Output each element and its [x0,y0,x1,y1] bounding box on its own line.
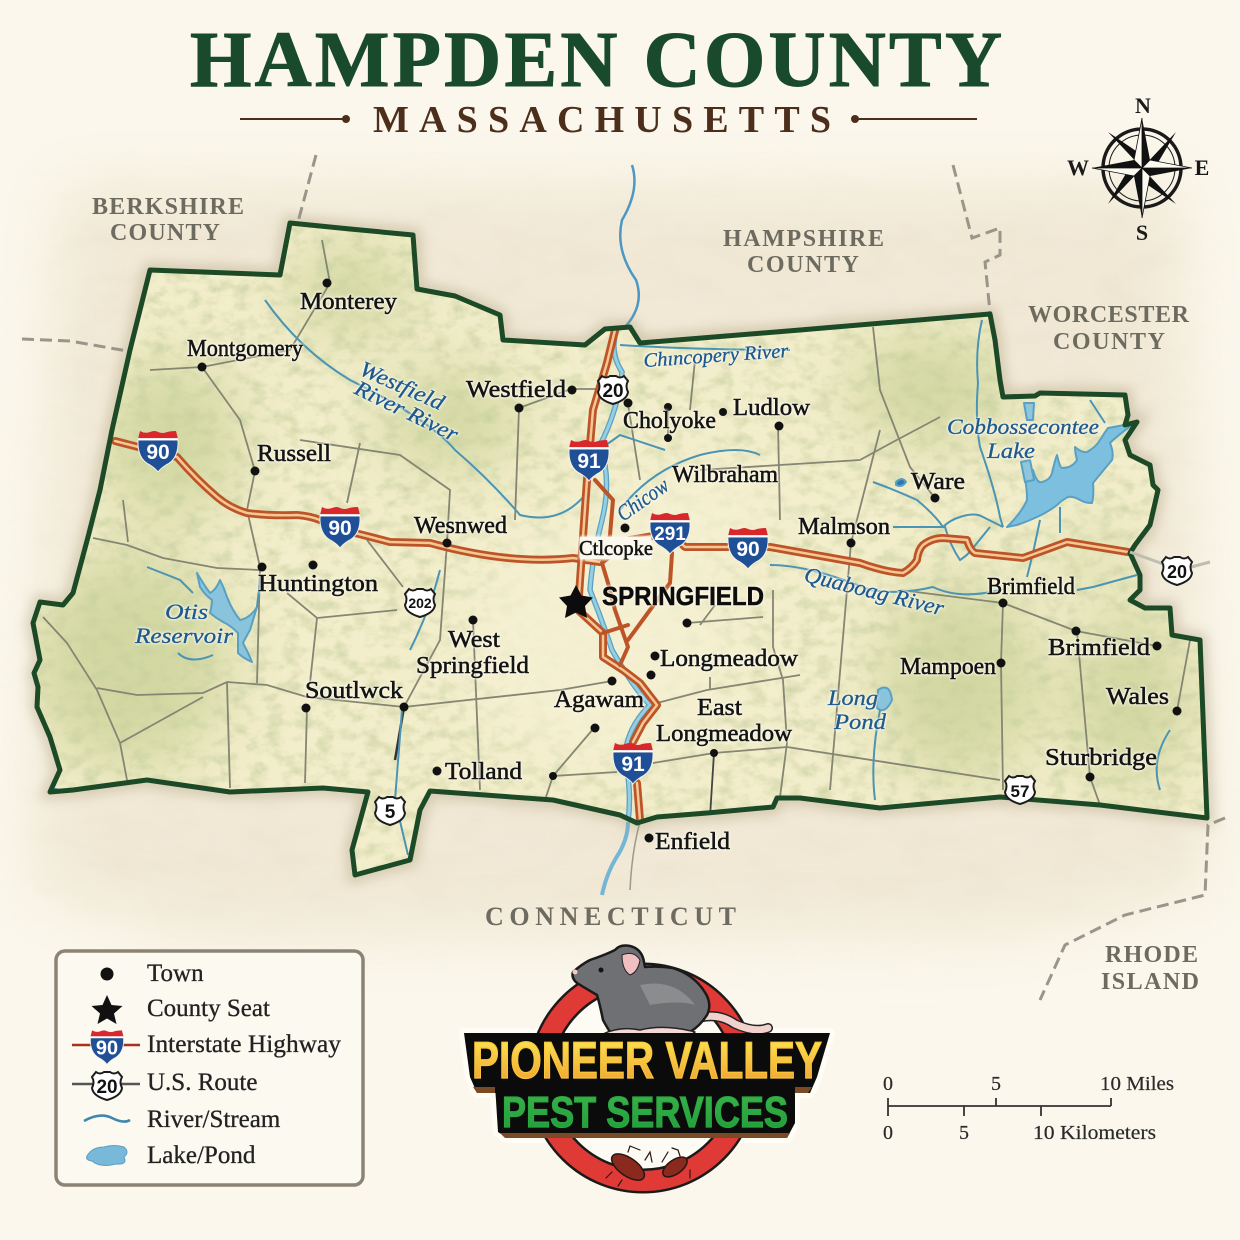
legend: U.S. route: 20 [96,1077,118,1098]
water labels: Otis [165,599,208,624]
town labels: Mampoen [900,654,996,680]
shield: US 202: 202 [408,595,432,611]
water labels: Pond [833,709,887,734]
neighboring region labels: CONNECTICUT [485,902,736,931]
title: HAMPDEN COUNTY [190,17,1002,104]
scale bar: 0 [883,1122,893,1144]
logo rat [572,946,768,1036]
surrounding tan terrain [19,172,1221,952]
town labels: Montgomery [187,336,303,362]
legend: interstate highway: Interstate Highway [147,1031,342,1058]
logo text: Pioneer Valley: PIONEER VALLEY [472,1032,822,1090]
town labels: Wesnwed [414,513,507,539]
logo white halo [464,964,830,1192]
shield: US 5 [375,797,405,825]
shield: I-90 east: 90 [736,538,760,561]
US route shields [375,376,1192,825]
scale bar: 10 Miles [1100,1073,1174,1095]
water labels [134,340,1099,734]
legend: river/stream: River/Stream [147,1106,281,1133]
shield: I-91 north: 91 [577,450,601,473]
water labels: Long [827,685,878,710]
shield: US 20 east [1162,557,1192,585]
legend [56,951,363,1185]
water labels: Chicow [612,472,674,526]
neighboring region labels: HAMPSHIRE [723,226,884,252]
neighboring region labels: RHODE [1105,942,1198,968]
scale bar [883,1073,1174,1144]
legend: U.S. route: U.S. Route [147,1069,257,1096]
neighboring region labels: ISLAND [1101,969,1199,995]
town labels: Cholyoke [623,408,716,434]
neighboring region labels: COUNTY [110,220,220,246]
interstate shields [138,431,768,784]
scale bar: 10 Kilometers [1033,1122,1156,1144]
logo bottom banner [495,1085,795,1138]
interstate 291 and connectors [595,480,672,665]
county boundary [33,223,1207,875]
logo top banner [464,1033,830,1093]
county land [20,210,1220,890]
logo cockroaches [606,1146,690,1186]
town dots [198,278,1182,842]
interstate 91 [578,330,657,820]
town labels: Agawam [554,687,644,713]
county drop shadow [33,223,1207,875]
town labels: Monterey [300,289,397,315]
scale bar: 5 [991,1073,1001,1095]
town labels [187,289,1169,855]
town labels: Brimfield [1048,635,1150,661]
logo text: Pest Services: PEST SERVICES [502,1088,788,1137]
logo prohibition ring [540,975,746,1181]
town labels: Enfield [655,829,730,855]
town labels: Longmeadow [660,646,799,672]
compass rose: W [1067,155,1089,180]
legend: lake/pond [87,1142,256,1169]
town labels: Russell [257,441,331,467]
town labels: Ctlcopke [579,536,653,560]
town labels: West [448,627,500,653]
logo: Pioneer Valley Pest Services [464,946,830,1192]
town labels: SPRINGFIELD [602,581,764,611]
shield: US 57: 57 [1011,782,1029,801]
town labels: Soutlwck [305,678,403,704]
shield: US 20: 20 [602,381,624,402]
water labels: Chıncopery River [643,340,789,372]
shield: I-90 east [728,528,768,569]
neighboring region labels: COUNTY [1053,329,1165,355]
legend: interstate highway [72,1030,342,1064]
legend: interstate highway: 90 [96,1037,118,1059]
shield: I-91 south [613,743,653,784]
compass rose: N [1135,93,1151,118]
shield: I-90 west: 90 [146,441,170,464]
compass rose [1067,93,1209,245]
water labels: Quaboag River [802,562,947,621]
water labels: Westfield [356,356,449,416]
shield: US 20 east: 20 [1167,562,1187,582]
neighboring region labels: COUNTY [747,252,859,278]
water labels: Lake [986,438,1035,463]
neighboring region labels [92,194,1199,995]
shield: I-90 [320,507,360,548]
legend: U.S. route [72,1069,257,1100]
town labels: Wales [1106,684,1169,710]
minor road network [43,240,1190,817]
legend: town: Town [147,960,204,987]
town labels: Brimfield [987,574,1075,600]
water labels: Reservoir [134,623,234,648]
shield: I-91 south: 91 [621,753,645,776]
town labels: Ludlow [733,395,811,421]
scale bar: 5 [959,1122,969,1144]
county seat star [559,585,593,618]
lakes [197,403,1135,710]
shield: I-90: 90 [328,517,352,540]
town labels: Wilbraham [672,462,778,488]
legend: town [100,960,204,987]
town labels: East [697,695,742,721]
shield: US 57 [1005,776,1035,804]
river north of county [620,165,639,327]
neighboring region labels: BERKSHIRE [92,194,244,220]
water labels: Cobbossecontee [947,414,1099,439]
shield: US 5: 5 [385,802,396,823]
town labels: Westfield [466,377,566,403]
scale bar: 0 [883,1073,893,1095]
shield: I-291 [650,513,690,554]
shield: US 202 [405,589,435,617]
town labels: Ware [911,469,965,495]
water labels: River River [350,375,463,447]
rivers [20,300,1170,855]
town labels: Sturbridge [1045,745,1157,771]
compass rose: S [1136,220,1148,245]
logo wood trim [473,1087,812,1138]
highways [115,330,1128,820]
compass rose: E [1195,155,1209,180]
river south of county [602,822,640,895]
shield: I-90 west [138,431,178,472]
subtitle: Massachusetts [240,99,977,141]
town labels: Springfield [416,653,529,679]
town labels: Huntington [258,571,378,597]
subtitle: Massachusetts: MASSACHUSETTS [373,99,831,141]
shield: I-291: 291 [654,524,686,545]
interstate 90 [115,441,1128,573]
shield: I-91 north [569,440,609,481]
town labels: Tolland [445,759,522,785]
US 20 east extension [1130,552,1210,570]
shield: US 20 [598,376,628,404]
legend: county seat: County Seat [147,995,270,1022]
town labels: Malmson [798,514,890,540]
legend: lake/pond: Lake/Pond [147,1142,256,1169]
legend: county seat [92,995,270,1024]
neighboring region labels: WORCESTER [1028,302,1190,328]
neighboring state and county boundary lines [22,155,1225,1000]
legend: river/stream [84,1106,281,1133]
town labels: Longmeadow [656,721,793,747]
county map [20,210,1220,890]
